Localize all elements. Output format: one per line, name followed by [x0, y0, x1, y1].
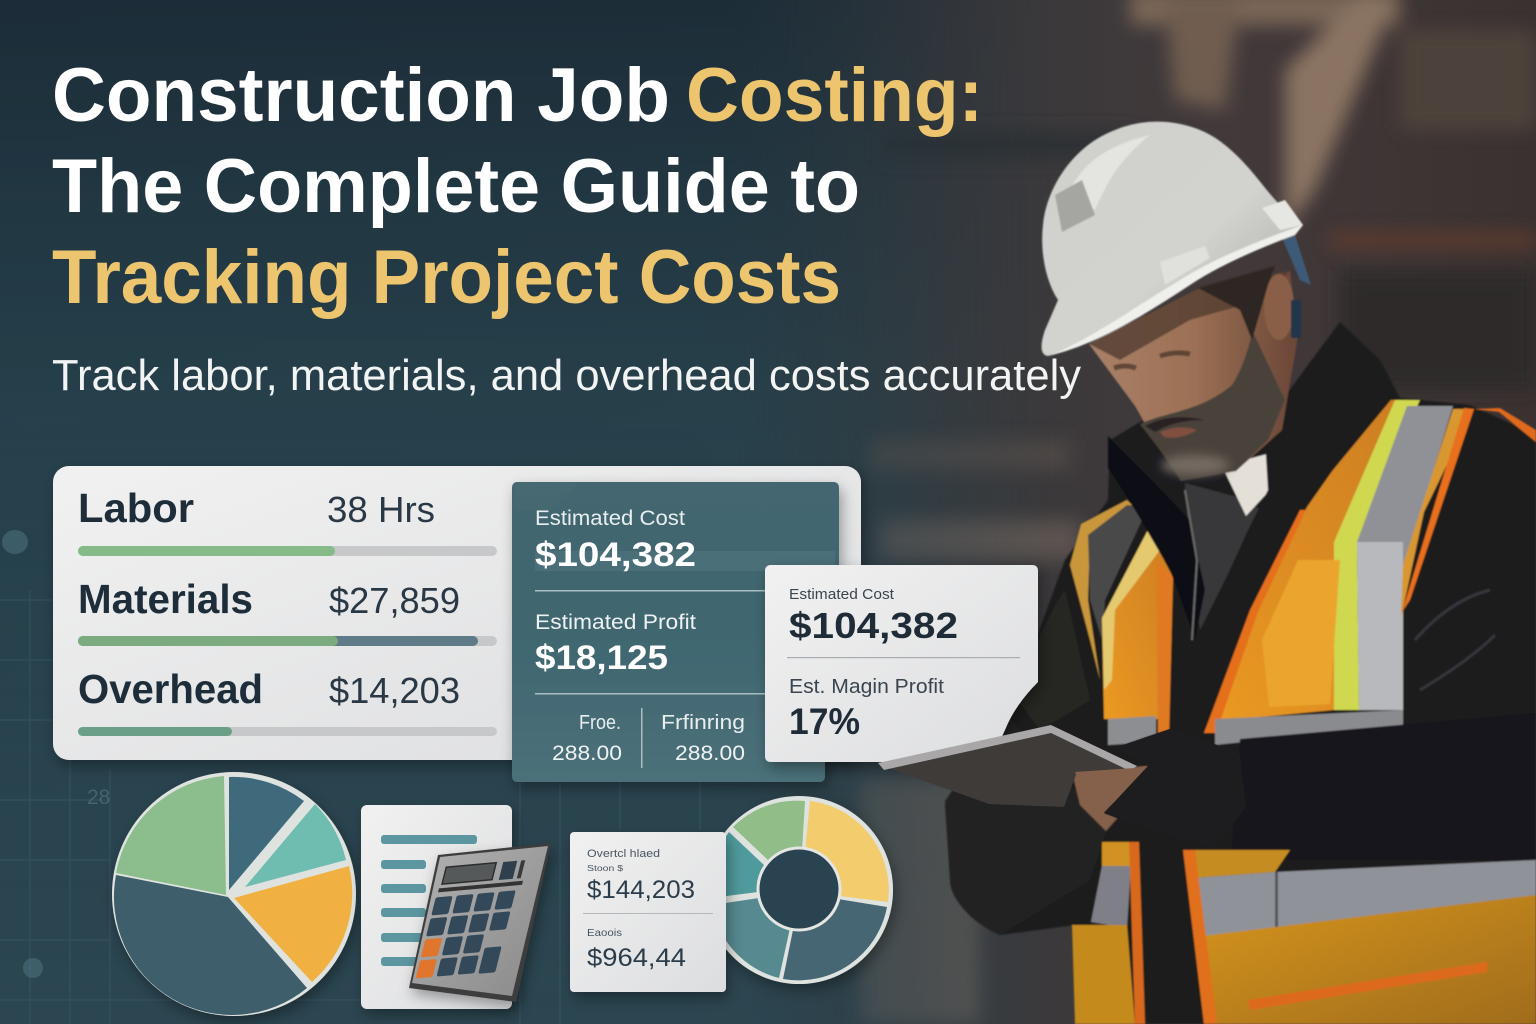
beard: [1140, 332, 1285, 481]
hard hat side clip: [1262, 200, 1303, 230]
panel: overhead card: [570, 832, 726, 992]
pie slice: green: [116, 776, 226, 895]
glove over tablet: [1104, 728, 1246, 848]
face: [1089, 271, 1298, 477]
donut slice: upper teal: [710, 832, 765, 898]
panel: estimated margin card: Estimated Cost: [789, 586, 895, 603]
panel: overhead card: $964,44: [587, 944, 686, 972]
panel: estimate summary: Froe.: [579, 712, 621, 734]
sleeve fold: [1415, 590, 1495, 690]
document icon: [361, 805, 512, 1009]
panel: estimated margin card: [765, 565, 1038, 762]
row: overhead: $14,203: [329, 670, 460, 711]
row: overhead: Overhead: [78, 666, 263, 712]
panel: estimate summary: Estimated Profit: [535, 611, 696, 634]
zipper: [1185, 490, 1197, 640]
panel: estimate summary: $104,382: [535, 536, 696, 574]
hair: [1198, 266, 1275, 340]
panel: estimate summary: Estimated Cost: [535, 507, 685, 530]
hard hat vent: [1055, 180, 1095, 232]
pie slice: slate: [114, 875, 307, 1015]
jacket sleeve highlight: [1010, 590, 1090, 730]
hard hat ridge: [1070, 135, 1150, 210]
title: Tracking Project Costs: [52, 235, 841, 320]
panel: overhead card: Overtcl hlaed: [587, 848, 660, 860]
panel: estimate summary: Frfinring: [661, 712, 745, 734]
left vest panel: [1070, 500, 1173, 745]
title: Construction Job: [52, 53, 670, 138]
subtitle: Track labor, materials, and overhead costs accurately: [52, 351, 1081, 400]
donut slice: lower teal: [712, 898, 790, 978]
donut slice: green: [733, 801, 805, 861]
background faded marks: 28: [87, 786, 110, 809]
tablet: [878, 725, 1246, 848]
panel: estimate summary: $18,125: [535, 639, 668, 677]
donut chart: [705, 796, 893, 984]
row: labor: Labor: [78, 485, 194, 531]
row: materials: [78, 576, 497, 646]
title: Costing:: [686, 53, 983, 138]
thumb on tablet: [1075, 766, 1148, 805]
panel: estimated margin card: 17%: [789, 701, 860, 742]
eyes: [1114, 353, 1190, 368]
ear: [1264, 274, 1294, 340]
hard hat: [1042, 122, 1311, 356]
collar: [1108, 436, 1205, 640]
panel: estimate summary: 288.00: [552, 742, 622, 765]
row: materials: $27,859: [329, 580, 460, 621]
helmet strap at neck: [1291, 300, 1301, 338]
pie slice: blue: [229, 777, 304, 890]
donut slice: yellow: [805, 801, 889, 902]
panel: estimated margin card: Est. Magin Profit: [789, 676, 944, 698]
panel: estimate summary: [512, 482, 839, 782]
pie chart: [112, 772, 356, 1016]
background faded marks: [2, 530, 110, 978]
lower vest panels: [1072, 842, 1536, 1024]
donut hole: [758, 848, 840, 930]
hand: [1072, 766, 1148, 831]
forehead shadow: [1089, 271, 1290, 360]
panel: overhead card: Eaoois: [587, 928, 622, 939]
panel: cost breakdown: [53, 466, 861, 760]
panel: estimate summary: 288.00: [675, 742, 745, 765]
hard hat brim: [1048, 225, 1303, 356]
right vest panel: [1204, 400, 1536, 745]
pie slice: amber: [234, 866, 352, 982]
title: [52, 53, 983, 320]
row: materials: Materials: [78, 576, 253, 622]
jacket: [945, 322, 1536, 1024]
panel: overhead card: $144,203: [587, 876, 695, 904]
calculator icon: [409, 843, 551, 1002]
lower vest gold band: [1102, 842, 1131, 866]
sleeve: [1231, 713, 1536, 860]
left arm glove: [945, 713, 1106, 935]
shirt: [1222, 450, 1282, 516]
row: labor: 38 Hrs: [327, 489, 435, 530]
row: labor: [78, 485, 497, 556]
background grid lines: [0, 590, 700, 1024]
moustache: [1145, 417, 1205, 432]
title: The Complete Guide to: [52, 144, 860, 229]
grey chin: [1161, 455, 1229, 475]
lower vest reflective bands: [1091, 860, 1536, 937]
panel: overhead card: Stoon $: [587, 864, 624, 873]
pie slice: teal: [245, 804, 346, 887]
donut slice: slate: [783, 899, 887, 980]
inner lining: [1185, 483, 1260, 630]
mouth: [1160, 427, 1197, 438]
panel: estimated margin card: $104,382: [789, 605, 958, 646]
hard hat clip: [1160, 246, 1210, 285]
worker photo illustration: [945, 122, 1536, 1024]
right glove: [1104, 728, 1246, 848]
row: overhead: [78, 666, 497, 736]
